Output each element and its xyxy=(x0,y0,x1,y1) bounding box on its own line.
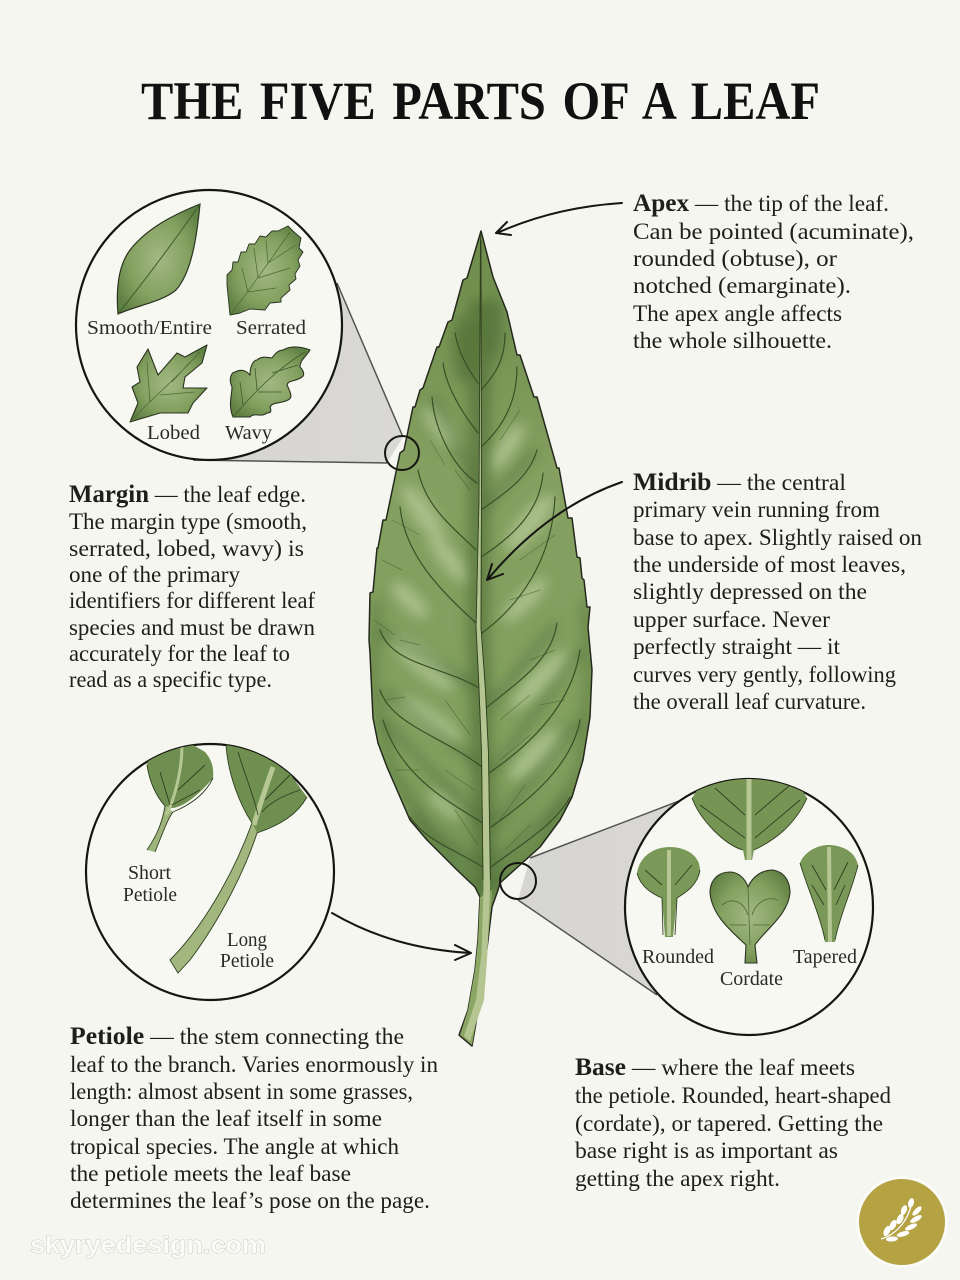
text block: margin: Margin — the leaf edge. xyxy=(69,479,306,508)
panel: margin types xyxy=(76,190,342,460)
panel circle xyxy=(86,744,334,1000)
leaf: wavy xyxy=(230,347,310,417)
label: Short Petiole: Short xyxy=(128,862,171,884)
text block: midrib: curves very gently, following xyxy=(633,662,896,688)
leaf: rounded xyxy=(637,847,700,937)
text block: midrib: perfectly straight — it xyxy=(633,634,840,660)
text block: petiole: leaf to the branch. Varies enormously in xyxy=(70,1052,438,1078)
text block: midrib: the overall leaf curvature. xyxy=(633,689,866,715)
text block: petiole xyxy=(70,1021,438,1214)
panel circle xyxy=(76,190,342,460)
text block: petiole: longer than the leaf itself in some xyxy=(70,1106,382,1132)
fine tertiary veins xyxy=(374,410,565,850)
text block: petiole: the petiole meets the leaf base xyxy=(70,1161,351,1187)
leaf: serrated xyxy=(227,226,303,315)
label: Lobed: Lobed xyxy=(147,422,200,444)
text block: apex: the whole silhouette. xyxy=(633,328,832,354)
label: Petiole (long): Petiole xyxy=(220,950,274,972)
leaf: smooth xyxy=(117,204,200,314)
leaf: cordate xyxy=(710,870,790,963)
text block: apex: Apex — the tip of the leaf. xyxy=(633,188,889,217)
side veins xyxy=(380,333,580,867)
text block: midrib: slightly depressed on the xyxy=(633,579,867,605)
text block: base: the petiole. Rounded, heart-shaped xyxy=(575,1083,891,1109)
watermark: skyryedesign.com xyxy=(30,1232,266,1259)
text block: midrib: base to apex. Slightly raised on xyxy=(633,525,922,551)
text block: midrib: the underside of most leaves, xyxy=(633,552,906,578)
text block: petiole: determines the leaf’s pose on the page. xyxy=(70,1188,430,1214)
text block: base: getting the apex right. xyxy=(575,1166,780,1192)
text block: petiole: length: almost absent in some grasses, xyxy=(70,1079,413,1105)
label: Smooth/Entire: Smooth/Entire xyxy=(87,317,212,339)
arrow: petiole xyxy=(332,913,471,960)
title: THE FIVE PARTS OF A LEAF xyxy=(141,71,820,131)
text block: apex: The apex angle affects xyxy=(633,301,842,327)
leaf: lobed xyxy=(130,345,207,422)
text block: base: Base — where the leaf meets xyxy=(575,1052,855,1081)
text block: base xyxy=(575,1052,891,1192)
zoom circle on base xyxy=(500,863,536,899)
label: Long Petiole: Long xyxy=(227,929,267,951)
label: Rounded: Rounded xyxy=(642,946,714,968)
text block: margin: accurately for the leaf to xyxy=(69,641,290,667)
text block: petiole: tropical species. The angle at which xyxy=(70,1134,399,1160)
leaf: long petiole xyxy=(170,740,307,973)
text block: apex: rounded (obtuse), or xyxy=(633,246,837,272)
petiole fill xyxy=(460,890,492,1045)
text block: apex: Can be pointed (acuminate), xyxy=(633,219,914,245)
text block: midrib: Midrib — the central xyxy=(633,467,846,496)
text block: base: (cordate), or tapered. Getting the xyxy=(575,1111,883,1137)
text block: margin xyxy=(69,479,315,693)
icon: wheat badge xyxy=(858,1178,946,1266)
leaf: short petiole xyxy=(147,740,213,852)
text block: midrib: upper surface. Never xyxy=(633,607,830,633)
arrow: apex xyxy=(496,203,622,235)
main leaf illustration xyxy=(368,230,593,1047)
label: Cordate: Cordate xyxy=(720,968,783,990)
leaf: tapered xyxy=(800,845,858,942)
panel: petiole lengths xyxy=(86,740,334,1000)
midrib dark edge xyxy=(476,235,490,880)
text block: margin: species and must be drawn xyxy=(69,615,315,641)
text block: margin: read as a specific type. xyxy=(69,667,272,693)
text block: petiole: Petiole — the stem connecting the xyxy=(70,1021,404,1050)
zoom wedge outline: base xyxy=(518,798,687,995)
label: Wavy: Wavy xyxy=(225,422,272,444)
zoom circle on margin xyxy=(385,436,419,470)
text block: base: base right is as important as xyxy=(575,1138,838,1164)
text block: margin: The margin type (smooth, xyxy=(69,509,307,535)
text block: margin: identifiers for different leaf xyxy=(69,588,315,614)
leaf outline xyxy=(369,231,592,1046)
label: Serrated: Serrated xyxy=(236,317,306,339)
zoom wedge: base xyxy=(518,798,687,995)
zoom wedge: margin xyxy=(193,290,403,463)
label: Tapered: Tapered xyxy=(793,946,857,968)
text block: margin: one of the primary xyxy=(69,562,240,588)
text block: apex: notched (emarginate). xyxy=(633,273,851,299)
text block: apex xyxy=(633,188,914,354)
text block: midrib: primary vein running from xyxy=(633,497,880,523)
panel circle xyxy=(625,779,873,1035)
text block: midrib xyxy=(633,467,922,715)
leaf: top sample xyxy=(692,770,807,860)
zoom wedge outline: margin xyxy=(193,283,403,463)
label: Petiole (short): Petiole xyxy=(123,884,177,906)
text block: margin: serrated, lobed, wavy) is xyxy=(69,536,304,562)
midrib xyxy=(464,240,490,1041)
panel: base shapes xyxy=(625,770,873,1035)
arrow: midrib xyxy=(487,482,622,580)
leaf blade fill xyxy=(370,234,592,1044)
